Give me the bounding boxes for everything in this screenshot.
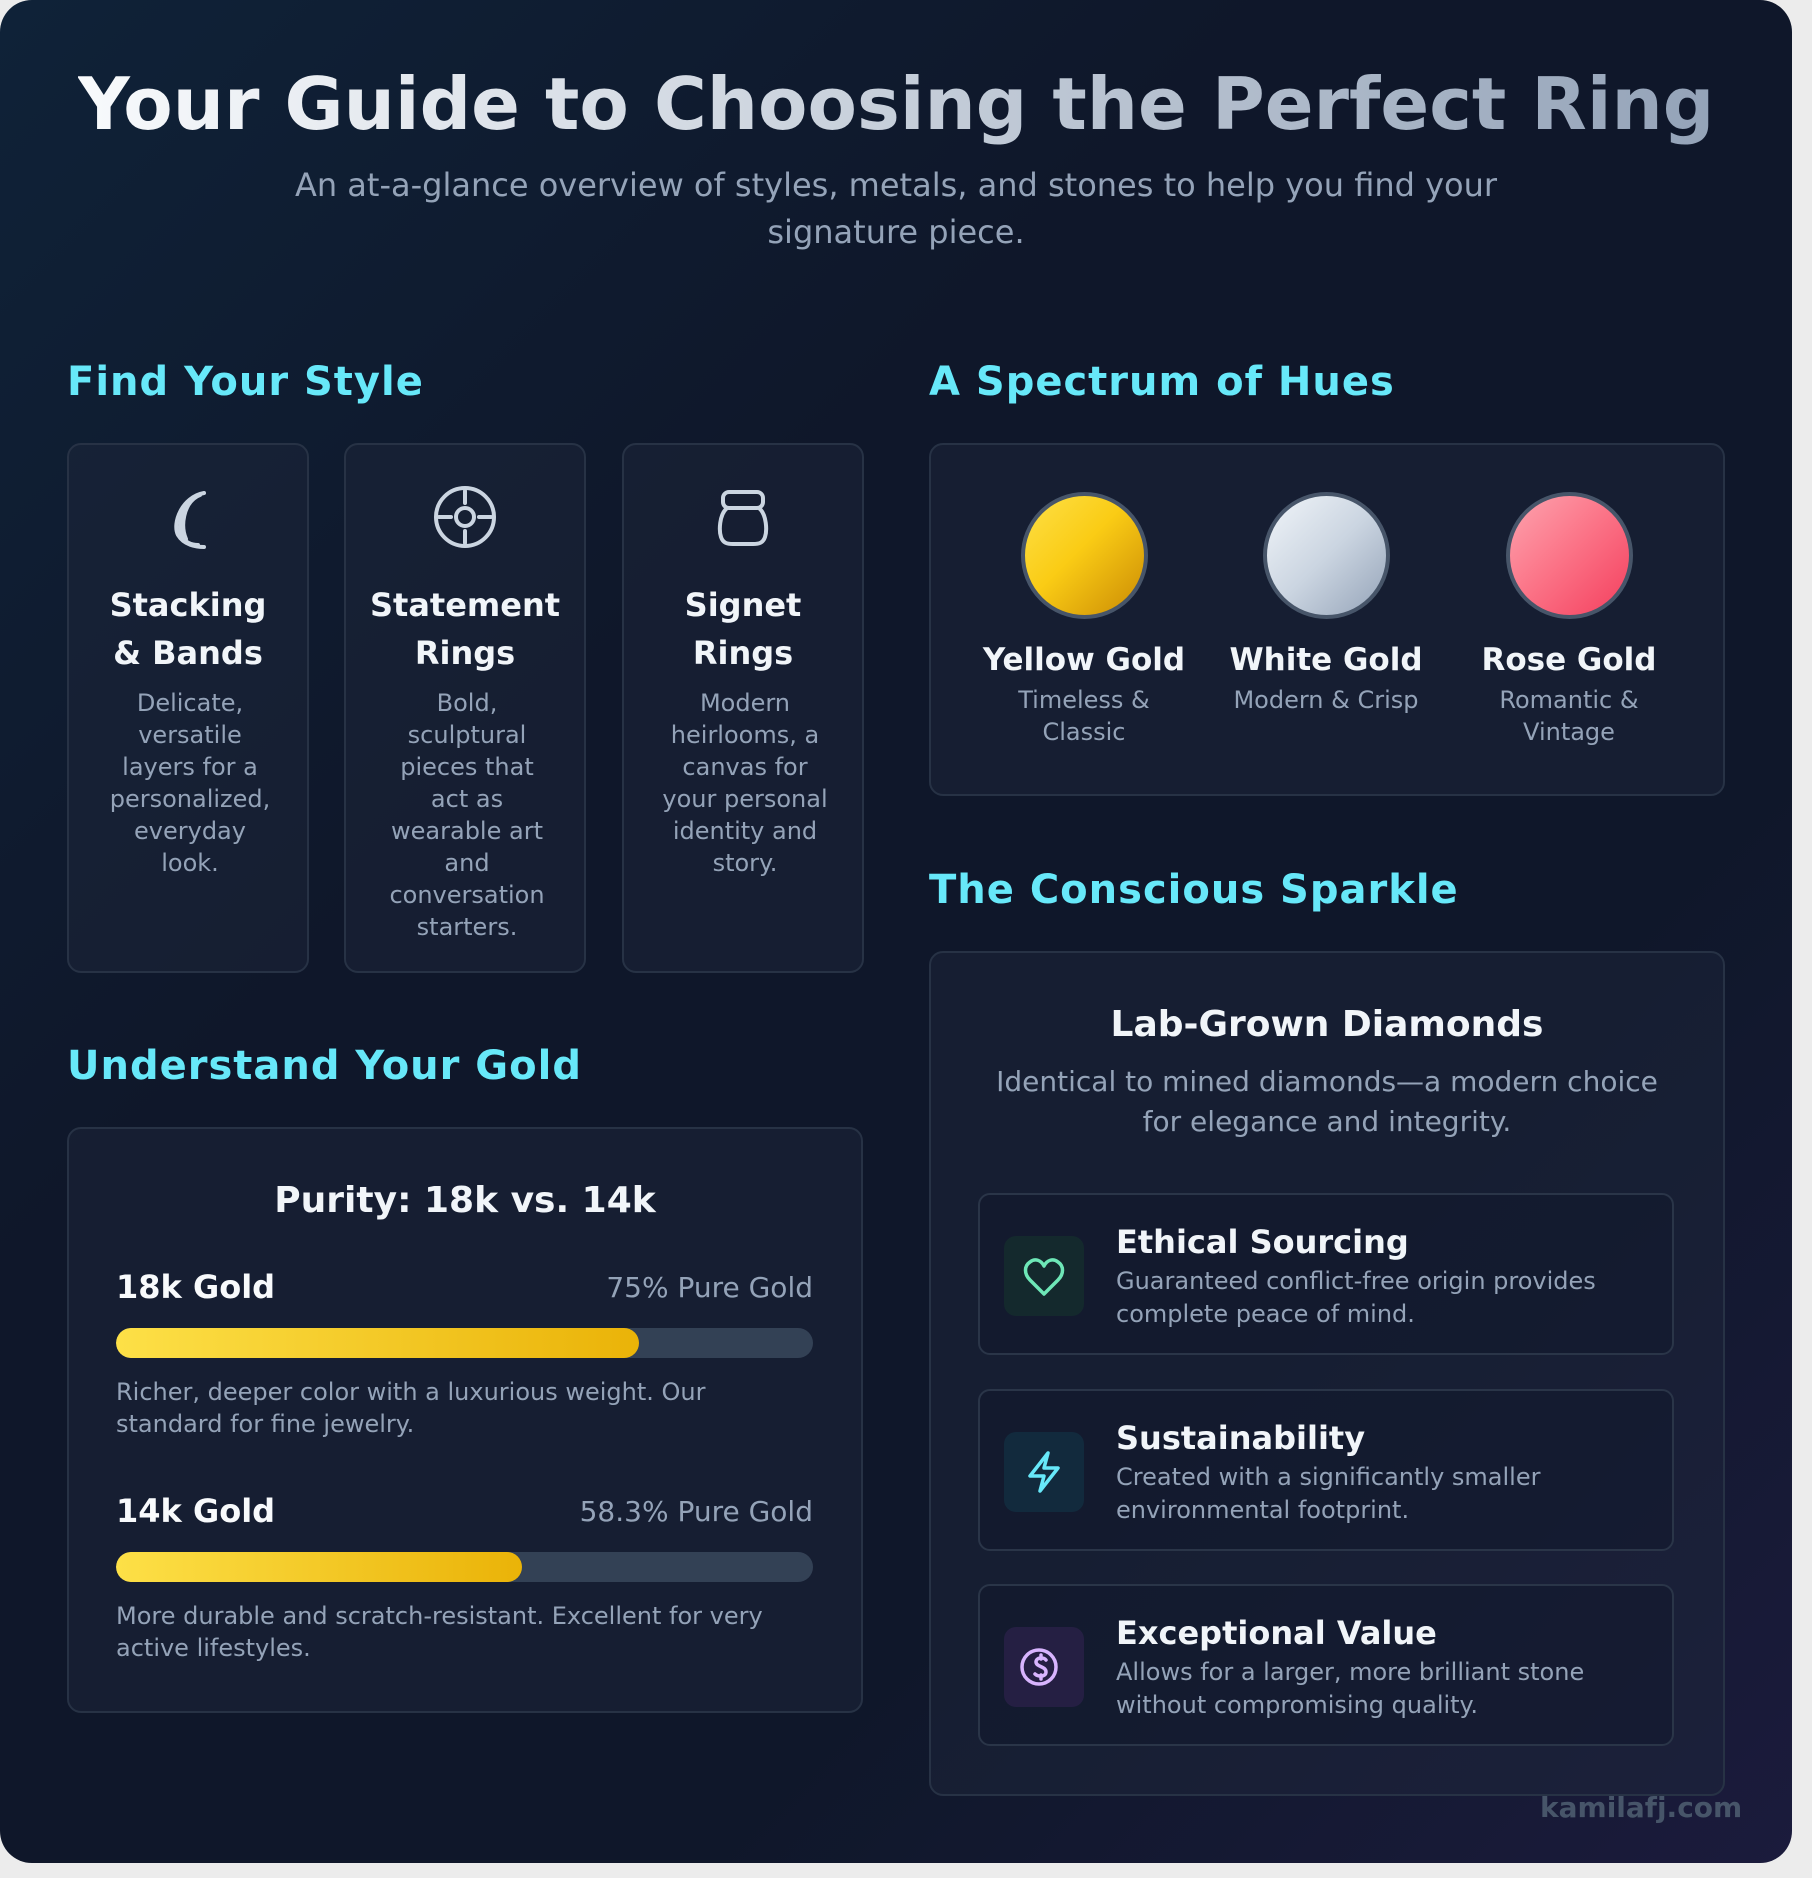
text: signet title: Rings	[693, 634, 793, 672]
text: 14k desc: More durable and scratch-resistant. Excellent for very	[116, 1602, 763, 1630]
text: stacking desc: personalized,	[110, 785, 270, 813]
bar: 14k	[116, 1552, 813, 1582]
panel: lab-grown	[929, 951, 1725, 1796]
value: 18k: 75% Pure Gold	[606, 1271, 813, 1304]
text: stacking title	[110, 586, 266, 672]
heading: spectrum of hues: A Spectrum of Hues	[929, 359, 1395, 405]
text: 14k desc	[116, 1602, 763, 1662]
text: statement desc: pieces that	[400, 753, 534, 781]
text: statement title: Rings	[415, 634, 515, 672]
hue: rose gold	[1482, 492, 1656, 746]
feature: value: without compromising quality.	[1116, 1691, 1478, 1719]
text: stacking desc: layers for a	[122, 753, 258, 781]
feature: sustainability	[978, 1389, 1674, 1551]
hue: yellow gold: Yellow Gold	[983, 642, 1185, 678]
hue: yellow gold: Classic	[1042, 718, 1126, 746]
text: statement desc: Bold,	[437, 689, 497, 717]
bar: 18k	[116, 1328, 813, 1358]
text: purity heading: Purity: 18k vs. 14k	[274, 1180, 656, 1221]
card: signet	[622, 443, 864, 973]
text: signet desc: story.	[713, 849, 777, 877]
text: statement desc: conversation	[389, 881, 545, 909]
text: statement desc: starters.	[417, 913, 517, 941]
text: statement desc: sculptural	[408, 721, 526, 749]
feature: value	[978, 1584, 1674, 1746]
hue: white gold: White Gold	[1229, 642, 1423, 678]
text: stacking title: Stacking	[110, 586, 266, 624]
value: 14k: 58.3% Pure Gold	[580, 1495, 813, 1528]
text: statement desc: and	[444, 849, 490, 877]
title: Your Guide to Choosing the Perfect Ring	[78, 62, 1714, 146]
hue: yellow gold: Timeless &	[1018, 686, 1150, 714]
text: 18k desc: standard for fine jewelry.	[116, 1410, 414, 1438]
feature: ethical: Guaranteed conflict-free origin provides	[1116, 1267, 1596, 1295]
text: statement title	[370, 586, 560, 672]
label: 14k: 14k Gold	[116, 1492, 275, 1530]
card: stacking	[67, 443, 309, 973]
hue: rose gold: Vintage	[1523, 718, 1615, 746]
subtitle: An at-a-glance overview of styles, metals, and stones to help you find your	[295, 166, 1497, 204]
text: stacking desc	[110, 689, 270, 877]
text: statement desc: act as	[431, 785, 503, 813]
feature: ethical: Ethical Sourcing	[1116, 1223, 1409, 1261]
heading: find your style: Find Your Style	[67, 359, 424, 405]
text: signet desc	[662, 689, 828, 877]
icon: target	[434, 486, 496, 548]
icon: signet	[718, 490, 768, 546]
text: stacking desc: look.	[161, 849, 219, 877]
text: signet desc: heirlooms, a	[671, 721, 819, 749]
text: 18k desc	[116, 1378, 706, 1438]
text: 14k desc: active lifestyles.	[116, 1634, 311, 1662]
text: lab-grown desc: Identical to mined diamonds—a modern choice	[996, 1065, 1658, 1098]
feature: sustainability: Created with a significantly smaller	[1116, 1463, 1540, 1491]
text: lab-grown title: Lab-Grown Diamonds	[1110, 1004, 1543, 1045]
text: stacking desc: everyday	[134, 817, 246, 845]
text: signet desc: canvas for	[682, 753, 808, 781]
feature: value: Exceptional Value	[1116, 1614, 1437, 1652]
panel: hues	[929, 443, 1725, 796]
feature: sustainability: Sustainability	[1116, 1419, 1365, 1457]
icon: heart	[1004, 1236, 1084, 1316]
feature: sustainability: environmental footprint.	[1116, 1496, 1409, 1524]
hue: rose gold: Romantic &	[1499, 686, 1639, 714]
text: signet desc: Modern	[700, 689, 790, 717]
watermark: kamilafj.com	[1540, 1791, 1742, 1824]
feature: value: Allows for a larger, more brilliant stone	[1116, 1658, 1584, 1686]
text: stacking desc: versatile	[138, 721, 242, 749]
text: stacking title: & Bands	[113, 634, 263, 672]
icon: stacked bands	[174, 491, 206, 549]
text: statement title: Statement	[370, 586, 560, 624]
text: 18k desc: Richer, deeper color with a luxurious weight. Our	[116, 1378, 706, 1406]
hue: white gold: Modern & Crisp	[1233, 686, 1419, 714]
text: signet title	[685, 586, 801, 672]
hue: yellow gold	[982, 492, 1185, 746]
text: stacking desc: Delicate,	[137, 689, 243, 717]
text: signet desc: identity and	[673, 817, 817, 845]
icon: bolt	[1004, 1432, 1084, 1512]
hue: white gold	[1229, 492, 1423, 714]
hue: rose gold: Rose Gold	[1482, 642, 1656, 678]
text: lab-grown desc: for elegance and integrity.	[1143, 1105, 1511, 1138]
feature: ethical	[978, 1193, 1674, 1355]
feature: ethical: complete peace of mind.	[1116, 1300, 1415, 1328]
text: statement desc: wearable art	[391, 817, 543, 845]
heading: understand your gold: Understand Your Gold	[67, 1043, 582, 1089]
text: signet title: Signet	[685, 586, 801, 624]
text: statement desc	[389, 689, 545, 941]
icon: coin	[1004, 1627, 1084, 1707]
heading: conscious sparkle: The Conscious Sparkle	[929, 867, 1459, 913]
subtitle: signature piece.	[767, 213, 1025, 251]
text: signet desc: your personal	[662, 785, 828, 813]
label: 18k: 18k Gold	[116, 1268, 275, 1306]
subtitle	[295, 166, 1497, 251]
panel: gold purity	[67, 1127, 863, 1713]
text: lab-grown desc	[996, 1065, 1658, 1138]
card: statement	[344, 443, 586, 973]
